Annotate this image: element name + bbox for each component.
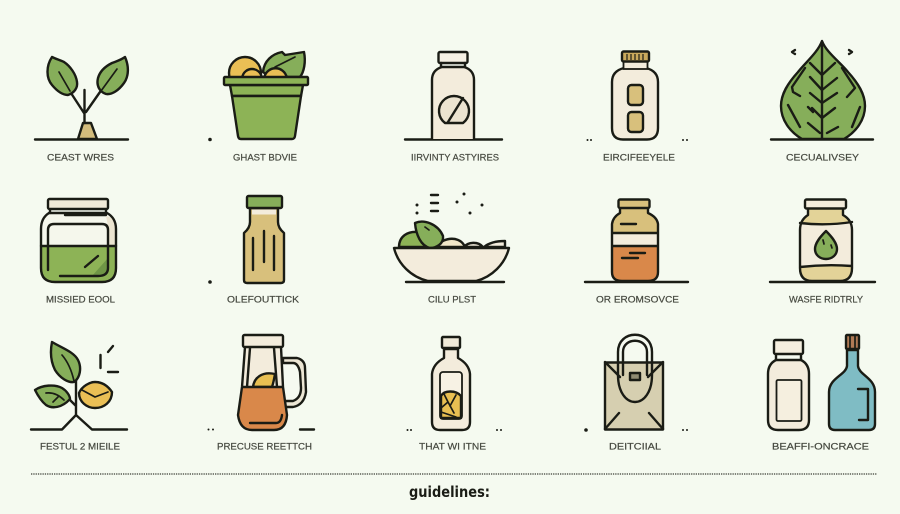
panel: big leaf [771, 41, 873, 164]
icon: bowl with fruit and dots [394, 192, 509, 282]
panel: jug [208, 335, 314, 452]
label: OR EROMSOVCE [596, 294, 679, 306]
panel: labelled jar [770, 200, 875, 306]
icon: jar with orange fill [585, 200, 688, 282]
icon: blue bottle [829, 335, 875, 430]
panel: pill bottle [405, 52, 502, 164]
panel: branch with leaves [31, 342, 127, 452]
label: PRECUSE REETTCH [217, 442, 312, 452]
label: MISSIED EOOL [46, 294, 115, 306]
panel: two bottles [768, 335, 875, 452]
panel: capsule bottle [586, 52, 688, 164]
panel: sprout [35, 57, 128, 164]
label: CECUALIVSEY [786, 152, 860, 164]
panel: orange jar [585, 200, 688, 306]
icon: bottle with round tablet [405, 52, 502, 140]
icon: bottle with two tan labels [586, 52, 688, 141]
panel: green jar [41, 199, 116, 306]
icon: cream bottle [768, 340, 809, 430]
label: EIRCIFEEYELE [603, 152, 675, 164]
icon: bottle with yellow contents [406, 337, 502, 431]
icon: jar half filled [41, 199, 116, 282]
icon: sprout with two leaves [35, 57, 128, 140]
footer text: guidelines: [409, 483, 490, 501]
panel: tote bag [584, 335, 688, 452]
panel: tall tan bottle [208, 196, 300, 306]
label: DEITCIIAL [609, 442, 661, 452]
icon: veined green leaf [771, 41, 873, 140]
label: IIRVINTY ASTYIRES [411, 152, 499, 164]
icon: tote bag [584, 335, 688, 432]
icon: jug with orange drink [208, 335, 314, 430]
panel: bowl [394, 192, 509, 306]
icon: bottle with vertical lines [208, 196, 284, 284]
icon: green pot [208, 52, 308, 141]
label: CEAST WRES [47, 152, 114, 164]
label: WASFE RIDTRLY [789, 294, 864, 306]
label: GHAST BDVIE [233, 152, 297, 164]
label: CILU PLST [428, 294, 476, 306]
panel: pot with food [208, 52, 308, 164]
label: FESTUL 2 MIEILE [40, 442, 120, 452]
icon: jar with leaf label [770, 200, 875, 282]
panel: small bottle [406, 337, 502, 452]
label: THAT WI ITNE [419, 442, 486, 452]
icon: branch with leaf and nut [31, 342, 127, 430]
label: OLEFOUTTICK [227, 294, 300, 306]
label: BEAFFI-ONCRACE [772, 442, 869, 452]
